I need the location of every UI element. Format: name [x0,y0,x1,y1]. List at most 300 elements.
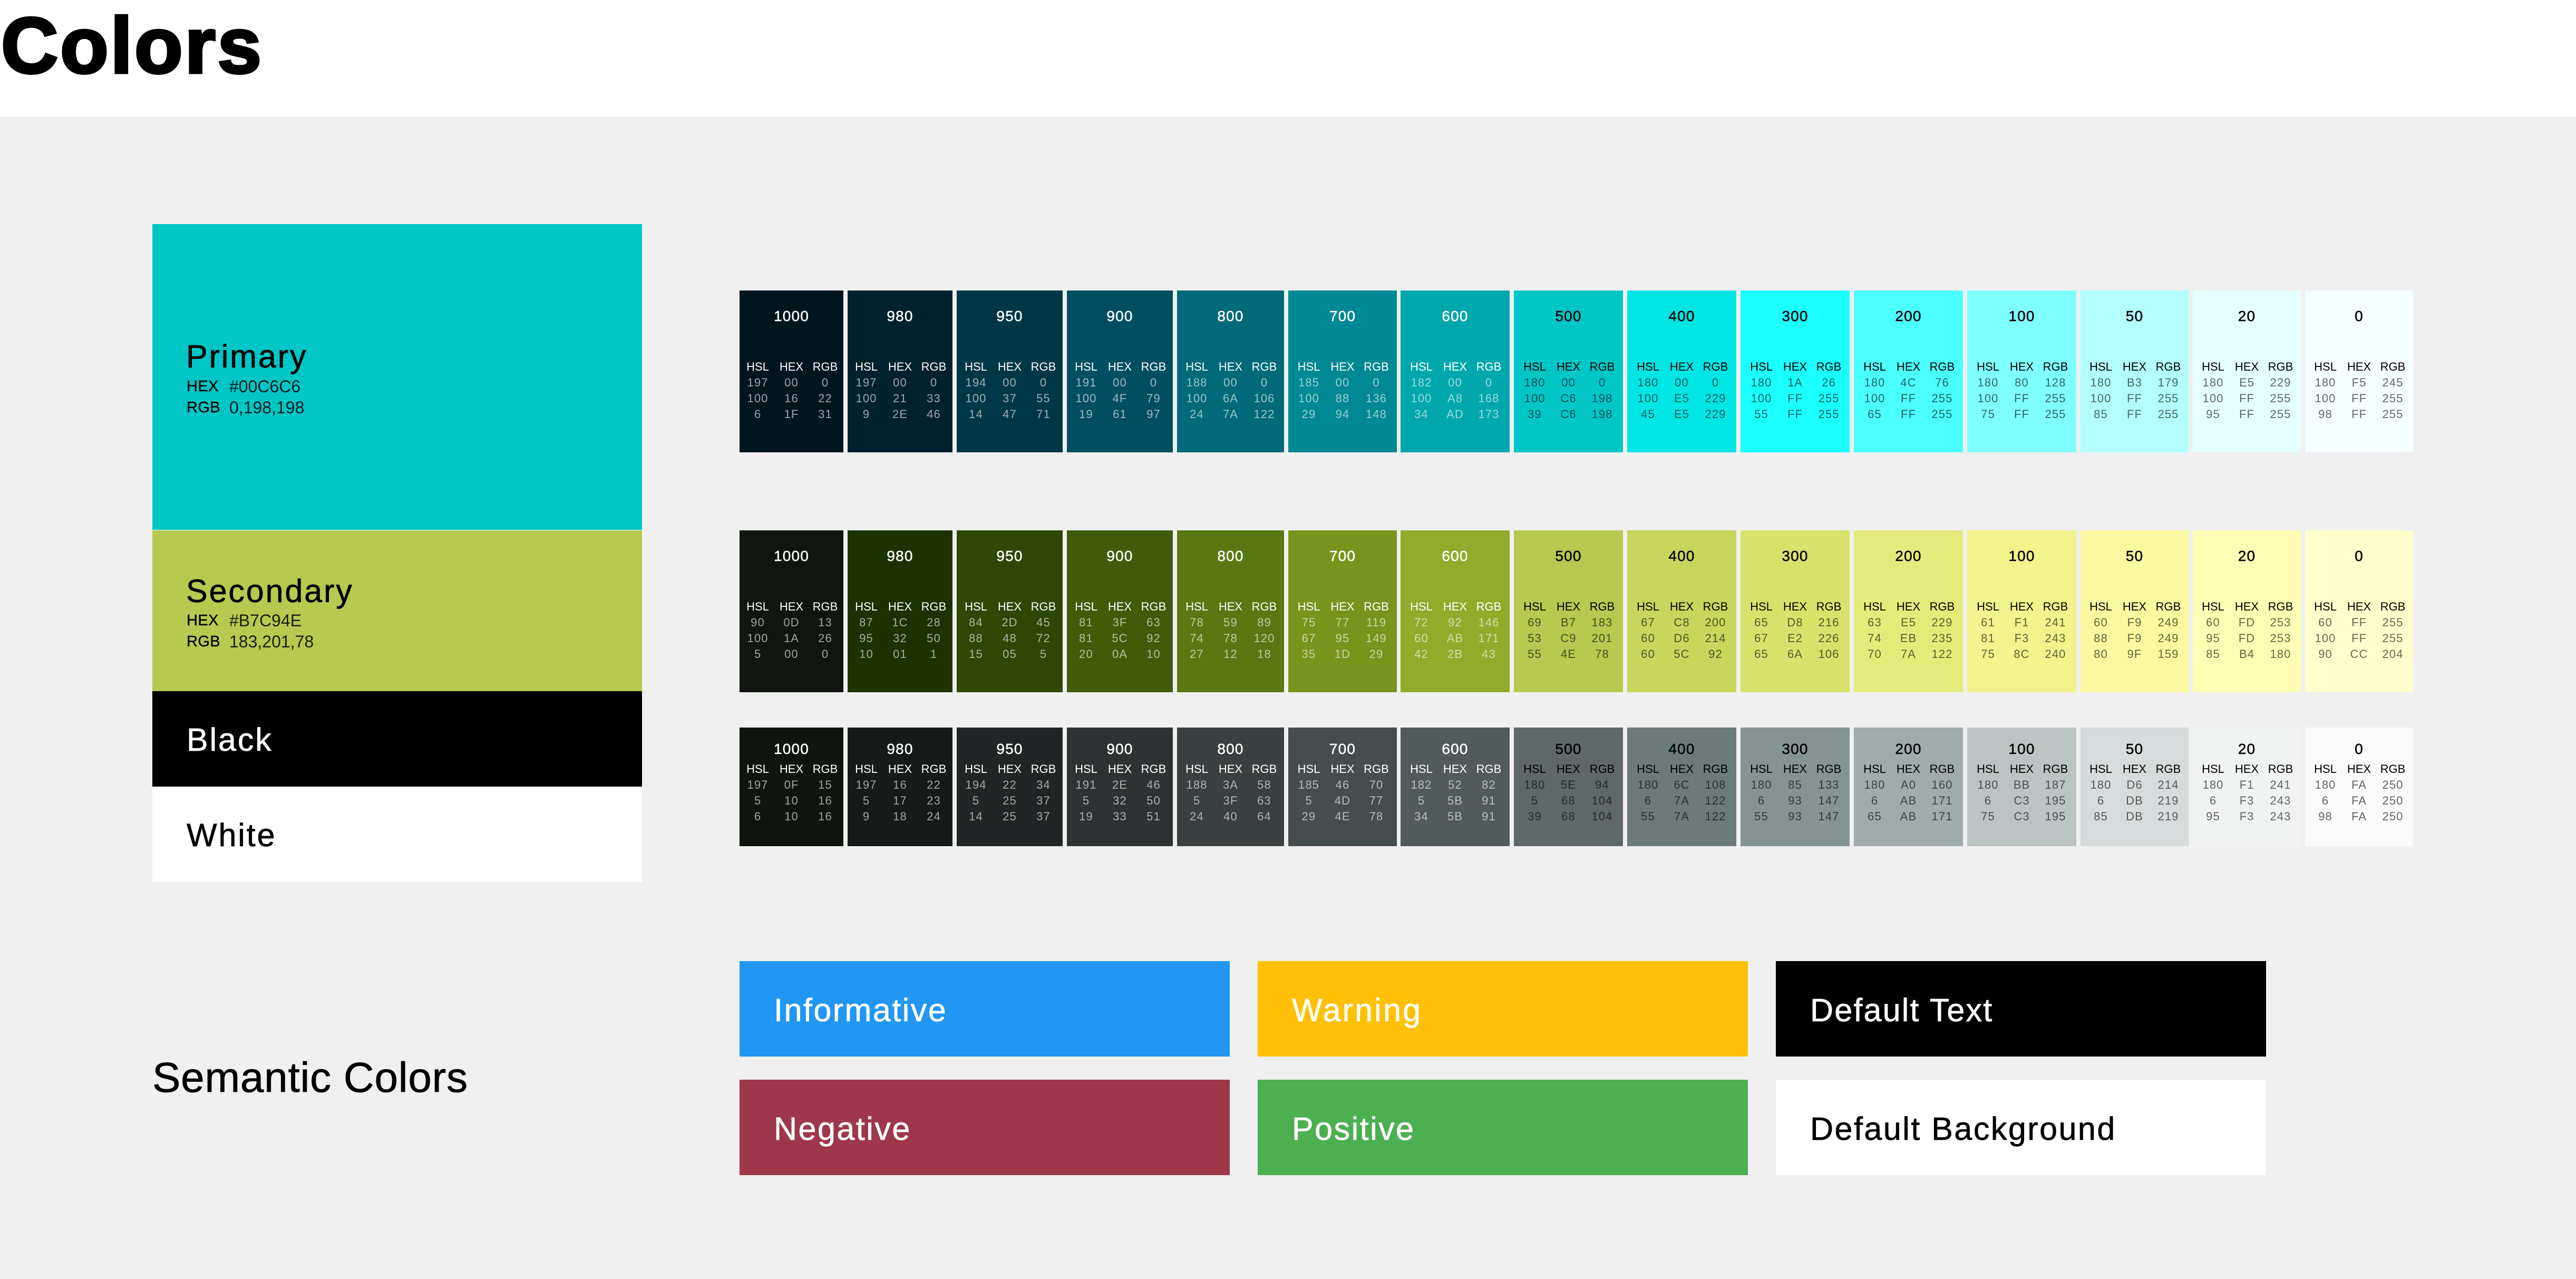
swatch: secondary 50: RGB [2156,600,2181,613]
swatch: secondary 300: HSL [1750,600,1773,613]
chip: warning [1258,961,1748,1057]
swatch: secondary 100: RGB [2043,600,2068,613]
swatch: secondary 0: HSL [2314,600,2337,613]
swatch: secondary 300: 300 [1782,548,1809,564]
swatch: primary 980: 980 [887,308,913,324]
swatch: secondary 1000: 100 [747,632,769,645]
swatch: neutral 200: 180 [1864,778,1885,791]
swatch: neutral 0: FA [2351,778,2367,791]
swatch: secondary 950: 950 [996,548,1023,564]
swatch: secondary 0: 90 [2318,647,2332,661]
swatch: neutral 800: 3A [1223,778,1238,791]
swatch: primary 700: 29 [1302,408,1316,421]
swatch: primary 100: 180 [1977,376,1999,389]
swatch: secondary 0: HEX [2347,600,2371,613]
swatch: primary 20: 255 [2270,408,2291,421]
swatch: secondary 1000: 90 [751,616,765,629]
swatch: primary 700: RGB [1364,360,1389,373]
swatch: primary 0: HSL [2314,360,2337,373]
swatch: neutral 0: 0 [2355,741,2364,757]
swatch: secondary 1000: 1000 [774,548,809,564]
swatch: neutral 200: RGB [1930,762,1955,776]
swatch: secondary 500: 4E [1561,647,1576,661]
swatch: primary 20: FF [2239,408,2254,421]
swatch: primary 900 [1067,290,1173,452]
swatch: primary 900: 19 [1079,408,1093,421]
swatch: primary 980: 21 [893,392,907,405]
swatch: primary 1000: 0 [822,376,829,389]
swatch: neutral 400: 108 [1705,778,1726,791]
swatch: neutral 950: 194 [965,778,987,791]
chip: positive [1258,1080,1748,1175]
swatch: neutral 700: 46 [1336,778,1349,791]
swatch: neutral 900: 191 [1075,778,1096,791]
swatch: secondary 100: 241 [2045,616,2066,629]
swatch: neutral 980: 16 [893,778,907,791]
swatch: secondary 100: F3 [2015,632,2029,645]
swatch: primary 50: RGB [2156,360,2181,373]
swatch: secondary 500: HEX [1557,600,1580,613]
swatch: neutral 800: 188 [1186,778,1207,791]
swatch: neutral 980: 197 [856,778,877,791]
swatch: primary 50: FF [2127,392,2142,405]
swatch: neutral 400: 6 [1645,794,1651,807]
swatch: primary 900: RGB [1141,360,1166,373]
swatch: neutral 300: 6 [1758,794,1765,807]
swatch: secondary 300: HEX [1783,600,1807,613]
swatch: neutral 0: RGB [2380,762,2405,776]
swatch: neutral 600: HEX [1443,762,1467,776]
swatch: neutral 400: RGB [1703,762,1728,776]
swatch: neutral 300: 180 [1751,778,1772,791]
swatch: neutral 400: 122 [1705,810,1726,823]
swatch: secondary 800: HEX [1219,600,1242,613]
swatch: secondary 400: HSL [1637,600,1659,613]
swatch: neutral 1000: 10 [784,794,799,807]
swatch: primary 100: 255 [2045,392,2066,405]
primary rgb value: RGB [187,399,220,416]
swatch: primary 500: HEX [1557,360,1580,373]
swatch: primary 500: 198 [1591,392,1613,405]
swatch: secondary 1000: 0D [783,616,800,629]
swatch: primary 980: 33 [927,392,941,405]
swatch: primary 1000: 6 [754,408,761,421]
swatch: primary 950: 55 [1036,392,1051,405]
swatch: secondary 700: 35 [1302,647,1316,661]
swatch: neutral 800 [1177,728,1284,846]
swatch: primary 700: 700 [1329,308,1356,324]
swatch: primary 980: 46 [927,408,941,421]
swatch: secondary 200: 229 [1931,616,1952,629]
secondary hex value: HEX [187,612,219,629]
swatch: neutral 0 [2305,728,2413,846]
swatch: primary 100: FF [2014,392,2029,405]
swatch: primary 950: RGB [1031,360,1056,373]
swatch: secondary 20: FD [2239,616,2255,629]
swatch: secondary 700: 29 [1369,647,1383,661]
swatch: primary 800: 106 [1253,392,1275,405]
swatch: neutral 950: 37 [1036,810,1051,823]
swatch: primary 200: 100 [1864,392,1885,405]
swatch: secondary 600: 92 [1448,616,1462,629]
swatch: secondary 600: HEX [1443,600,1467,613]
primary hex value [187,377,300,396]
swatch: neutral 900: 46 [1146,778,1161,791]
swatch: secondary 400: 5C [1674,647,1690,661]
swatch: secondary 600: 42 [1414,647,1428,661]
swatch: secondary 900: 5C [1112,632,1128,645]
swatch: secondary 900: 92 [1146,632,1161,645]
swatch: neutral 100: C3 [2014,794,2030,807]
chip: negative: Negative [774,1111,911,1147]
swatch: neutral 50: RGB [2156,762,2181,776]
swatch: primary 0: 180 [2315,376,2336,389]
swatch: neutral 400: HEX [1670,762,1694,776]
swatch: secondary 950: 15 [969,647,983,661]
swatch: secondary 50: 88 [2094,632,2108,645]
swatch: secondary 900: HSL [1075,600,1097,613]
swatch: neutral 700 [1288,728,1397,846]
swatch: primary 100: 100 [1977,392,1999,405]
swatch: primary 300 [1741,290,1850,452]
swatch: neutral 500: 68 [1561,810,1576,823]
swatch: primary 50: B3 [2127,376,2142,389]
swatch: secondary 200: 70 [1868,647,1882,661]
swatch: primary 50: 179 [2157,376,2179,389]
swatch: neutral 50: 50 [2126,741,2143,757]
swatch: primary 50: 255 [2157,392,2179,405]
swatch: neutral 100: HEX [2010,762,2034,776]
swatch: neutral 200: 6 [1871,794,1878,807]
swatch: neutral 950: 22 [1003,778,1017,791]
swatch: neutral 200: AB [1900,794,1917,807]
swatch: primary 500: 39 [1528,408,1542,421]
swatch: secondary 300: 226 [1818,632,1840,645]
swatch: secondary 980: 95 [859,632,873,645]
swatch: neutral 100: 195 [2045,810,2066,823]
swatch: neutral 400: 7A [1674,794,1689,807]
swatch: primary 300: 100 [1751,392,1772,405]
swatch: secondary 0: 0 [2355,548,2364,564]
swatch: secondary 980: HSL [855,600,878,613]
swatch: neutral 300: 93 [1788,810,1802,823]
swatch: secondary 300: RGB [1816,600,1841,613]
swatch: neutral 500: RGB [1590,762,1615,776]
swatch: neutral 980: 18 [893,810,907,823]
swatch: primary 20: 20 [2238,308,2256,324]
swatch: secondary 700: 77 [1336,616,1349,629]
swatch: primary 200: FF [1901,408,1916,421]
swatch: secondary 980: 32 [893,632,907,645]
swatch: primary 950: 37 [1003,392,1017,405]
swatch: secondary 200: HEX [1897,600,1920,613]
swatch: neutral 700: 5 [1305,794,1313,807]
swatch: secondary 800: 120 [1253,632,1275,645]
swatch: primary 100: 255 [2045,408,2066,421]
swatch: secondary 980: 1 [930,647,937,661]
swatch: primary 100: 128 [2045,376,2066,389]
swatch: primary 500: 180 [1524,376,1545,389]
swatch: secondary 300 [1741,530,1850,692]
swatch: secondary 20: 253 [2270,616,2291,629]
swatch: secondary 20: 180 [2270,647,2291,661]
swatch: primary 700: 88 [1336,392,1349,405]
swatch: secondary 500: C9 [1560,632,1577,645]
swatch: primary 0: 255 [2382,408,2404,421]
primary rgb value [187,398,304,417]
swatch: primary 800: HSL [1185,360,1208,373]
swatch: neutral 950: 25 [1003,810,1017,823]
swatch: primary 200: 180 [1864,376,1885,389]
swatch: secondary 800: 12 [1223,647,1238,661]
swatch: secondary 400: 200 [1705,616,1726,629]
swatch: secondary 100: 75 [1981,647,1995,661]
swatch: primary 500: 100 [1524,392,1545,405]
swatch: secondary 500: 183 [1591,616,1613,629]
swatch: secondary 50 [2081,530,2189,692]
swatch: primary 300: HSL [1750,360,1773,373]
swatch: secondary 20: 20 [2238,548,2256,564]
swatch: secondary 950: 88 [969,632,983,645]
swatch: secondary 50: 50 [2126,548,2143,564]
swatch: secondary 950: 5 [1040,647,1047,661]
swatch: neutral 50: 219 [2157,810,2179,823]
swatch: primary 980: RGB [921,360,946,373]
primary hex value: #00C6C6 [229,377,300,396]
swatch: neutral 900: 33 [1113,810,1127,823]
swatch: secondary 400: 67 [1641,616,1655,629]
swatch: neutral 500: 5E [1561,778,1576,791]
swatch: secondary 20: 253 [2270,632,2291,645]
swatch: neutral 1000: 6 [754,810,761,823]
swatch: secondary 950: HEX [998,600,1022,613]
swatch: primary 700: 100 [1298,392,1319,405]
swatch: primary 700: 94 [1336,408,1349,421]
swatch: secondary 600: 43 [1482,647,1496,661]
swatch: primary 20: E5 [2239,376,2254,389]
swatch: black [152,691,642,787]
swatch: primary 0: F5 [2352,376,2366,389]
swatch: primary 200: HEX [1897,360,1920,373]
swatch: primary 0: RGB [2380,360,2405,373]
swatch: secondary 50: F9 [2127,616,2142,629]
swatch: neutral 950: 14 [969,810,983,823]
swatch: primary 700 [1288,290,1397,452]
swatch: neutral 900: 900 [1106,741,1133,757]
swatch: neutral 600: 34 [1414,810,1428,823]
swatch: neutral 600: 91 [1482,810,1496,823]
swatch: primary 0: 255 [2382,392,2404,405]
swatch: secondary 200: HSL [1863,600,1886,613]
swatch: neutral 400: 180 [1637,778,1658,791]
swatch: secondary 200 [1854,530,1963,692]
swatch: neutral 300: HEX [1783,762,1807,776]
swatch: neutral 200 [1854,728,1963,846]
swatch: neutral 600: 5B [1447,810,1463,823]
swatch: secondary 980: 1C [892,616,908,629]
swatch: primary 800: 122 [1253,408,1275,421]
swatch: primary 500 [1514,290,1623,452]
swatch: primary 50: 180 [2090,376,2112,389]
swatch: primary 600: 600 [1442,308,1469,324]
swatch: primary 700: HSL [1298,360,1320,373]
swatch: primary 400 [1627,290,1736,452]
swatch: primary 200: 255 [1931,392,1952,405]
swatch: neutral 980: 23 [927,794,941,807]
chip: informative [740,961,1230,1057]
swatch: secondary 300: 106 [1818,647,1840,661]
swatch: primary 700: 185 [1298,376,1319,389]
swatch: secondary 20: FD [2239,632,2255,645]
swatch: secondary 200: 7A [1901,647,1916,661]
swatch: neutral 1000: 0F [784,778,799,791]
swatch: neutral 1000: 16 [818,810,832,823]
swatch: neutral 0: HEX [2347,762,2371,776]
swatch: primary 1000: 22 [818,392,832,405]
chip: default background [1776,1080,2266,1175]
swatch: primary 980: 2E [892,408,908,421]
swatch: primary 980 [848,290,952,452]
swatch: secondary 800: 74 [1190,632,1204,645]
swatch: secondary 700: 149 [1366,632,1387,645]
swatch: primary 980: HEX [888,360,912,373]
swatch: neutral 1000: 10 [784,810,799,823]
swatch: secondary 800: 89 [1257,616,1271,629]
swatch: secondary 980: 980 [887,548,913,564]
swatch: primary 0 [2305,290,2413,452]
swatch: primary 500: HSL [1523,360,1546,373]
swatch: secondary 500: HSL [1523,600,1546,613]
swatch: neutral 300: 147 [1818,794,1840,807]
swatch: primary 950: 00 [1003,376,1017,389]
swatch: primary 950: 100 [965,392,987,405]
swatch: neutral 300: 133 [1818,778,1840,791]
swatch: primary 100: 100 [2008,308,2035,324]
swatch: neutral 500: 94 [1595,778,1609,791]
swatch: primary 50: HEX [2123,360,2146,373]
swatch: primary 200: HSL [1863,360,1886,373]
swatch: neutral 980: 980 [887,741,913,757]
swatch: primary 980: 197 [856,376,877,389]
swatch: secondary 500: 55 [1528,647,1542,661]
swatch: primary 200: 200 [1895,308,1922,324]
swatch: secondary 50: 249 [2157,632,2179,645]
swatch: primary 20: 95 [2206,408,2220,421]
swatch: primary 600: 00 [1448,376,1462,389]
swatch: primary 400: E5 [1674,392,1689,405]
swatch: neutral 50: D6 [2126,778,2143,791]
swatch: neutral 600: 82 [1482,778,1496,791]
swatch: secondary 1000 [740,530,843,692]
swatch: neutral 600: 52 [1448,778,1462,791]
swatch: neutral 800: HSL [1185,762,1208,776]
swatch: secondary 600: RGB [1476,600,1501,613]
swatch: neutral 200: 160 [1931,778,1952,791]
swatch: primary 1000: 100 [747,392,769,405]
swatch: primary 20: 100 [2202,392,2223,405]
swatch: secondary 1000: 1A [784,632,799,645]
swatch: neutral 1000: 1000 [774,741,809,757]
swatch: primary 300: 1A [1787,376,1803,389]
swatch: secondary 1000: RGB [813,600,838,613]
swatch: primary 1000: 16 [784,392,799,405]
swatch: secondary 0: 255 [2382,616,2404,629]
swatch: primary 400: 100 [1637,392,1658,405]
swatch: primary 0: 245 [2382,376,2404,389]
swatch: primary 800: 00 [1223,376,1238,389]
swatch: neutral 700: 4D [1335,794,1350,807]
swatch: secondary 1000: 00 [784,647,799,661]
swatch: secondary 500: 201 [1591,632,1613,645]
swatch: primary 800: RGB [1252,360,1277,373]
swatch: neutral 20: HSL [2202,762,2224,776]
swatch: neutral 200: 171 [1931,810,1952,823]
swatch: primary 800: 800 [1217,308,1244,324]
swatch: neutral 800: HEX [1219,762,1242,776]
swatch: secondary 900: 3F [1113,616,1127,629]
swatch: primary 200 [1854,290,1963,452]
swatch: neutral 900: 2E [1112,778,1127,791]
swatch: neutral 950: 34 [1036,778,1051,791]
swatch: neutral 980: 9 [863,810,870,823]
swatch: secondary 20: HEX [2235,600,2259,613]
swatch: neutral 800: 40 [1223,810,1238,823]
swatch: secondary 100: 8C [2014,647,2030,661]
swatch: primary 1000 [740,290,843,452]
swatch: secondary 950: 45 [1036,616,1051,629]
panel: primary tint scale [740,290,2413,452]
swatch: primary 1000: HEX [780,360,803,373]
swatch: neutral 0: 250 [2382,778,2404,791]
swatch: neutral 0: 250 [2382,794,2404,807]
swatch: neutral 950: 5 [973,794,979,807]
swatch: primary 900: HEX [1108,360,1132,373]
swatch: neutral 700: 78 [1369,810,1383,823]
swatch: secondary 950 [957,530,1063,692]
swatch: neutral 500: 104 [1591,810,1613,823]
swatch: neutral 900: 19 [1079,810,1093,823]
swatch: primary 600 [1401,290,1510,452]
swatch: secondary 800: 78 [1190,616,1204,629]
swatch: primary 400: 0 [1712,376,1719,389]
swatch: neutral 1000: RGB [813,762,838,776]
swatch: primary 100: 80 [2015,376,2029,389]
swatch: primary 500: C6 [1560,408,1577,421]
swatch: primary 400: 400 [1668,308,1695,324]
swatch: secondary 800: 78 [1223,632,1238,645]
swatch: primary 500: C6 [1560,392,1577,405]
swatch: primary 400: RGB [1703,360,1728,373]
swatch: primary 980: HSL [855,360,878,373]
swatch: secondary 700: HEX [1330,600,1355,613]
chip: default background: Default Background [1810,1111,2116,1147]
swatch: neutral 500: 68 [1561,794,1576,807]
swatch: neutral 900: HEX [1108,762,1132,776]
swatch: neutral 900: RGB [1141,762,1166,776]
swatch: neutral 950: HEX [998,762,1022,776]
swatch: primary 300: 55 [1754,408,1768,421]
swatch: neutral 600: 600 [1442,741,1469,757]
swatch: primary 400: 00 [1675,376,1689,389]
swatch: primary 600: 173 [1478,408,1499,421]
swatch: primary 800: 6A [1223,392,1238,405]
swatch: secondary 600: 171 [1478,632,1499,645]
swatch: secondary 20 [2193,530,2301,692]
chip: informative: Informative [774,992,947,1028]
swatch: primary 1000: 31 [818,408,832,421]
swatch: secondary 700: 67 [1302,632,1316,645]
swatch: neutral 20: 180 [2202,778,2223,791]
